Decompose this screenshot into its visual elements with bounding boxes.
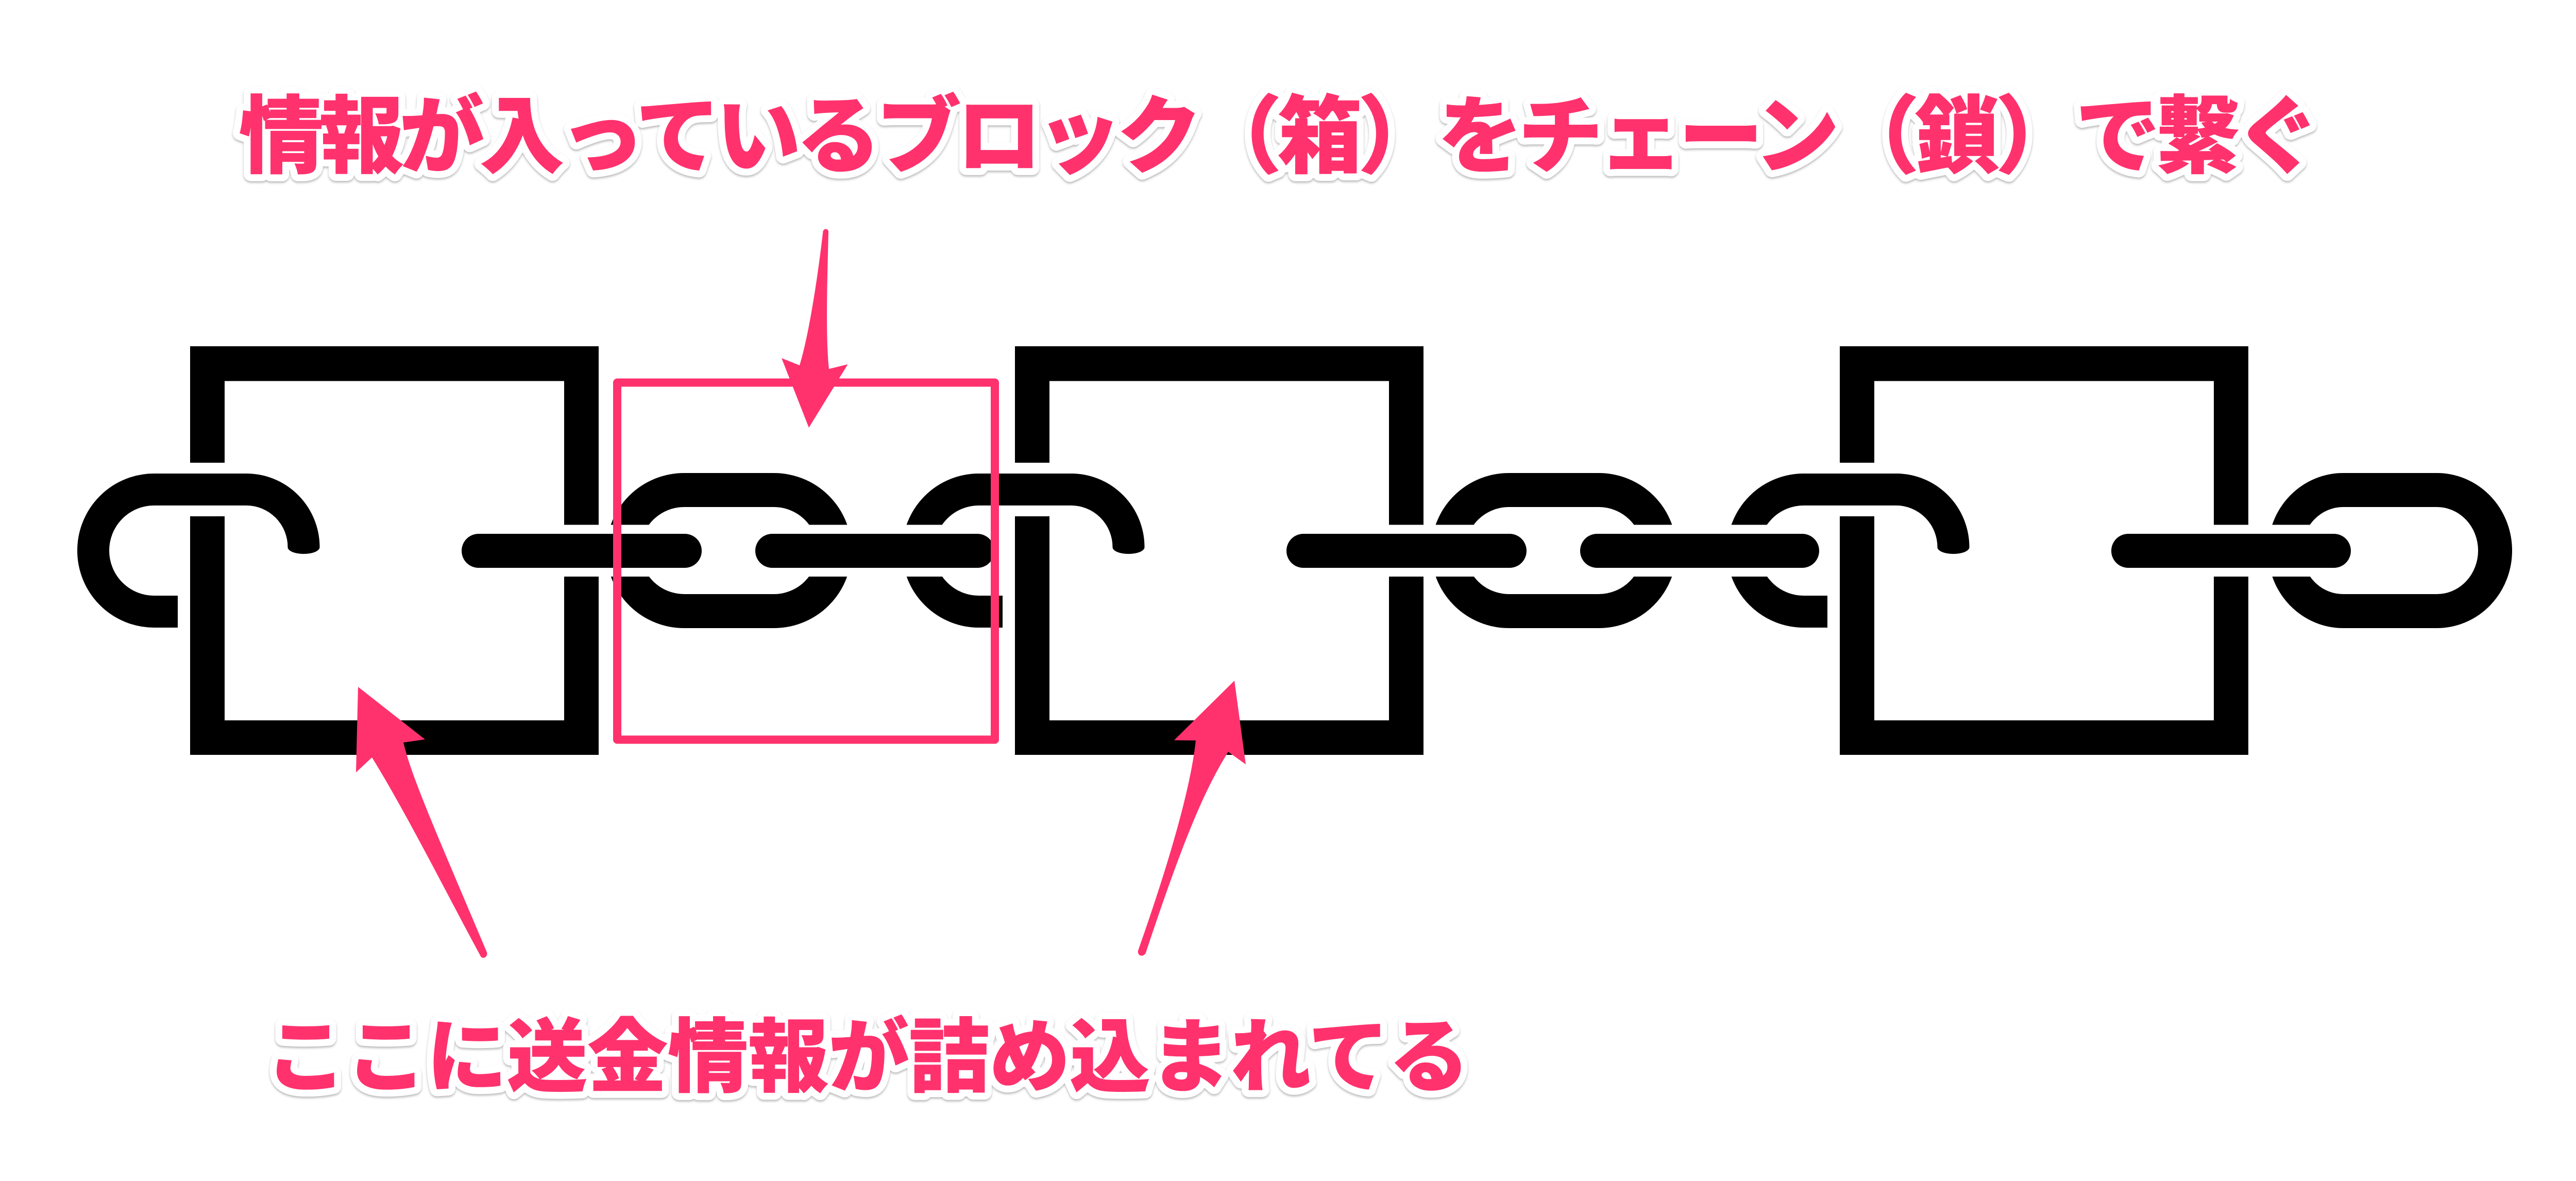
connecting bars xyxy=(462,534,2351,568)
block 2 box xyxy=(1015,346,1423,755)
block 1 box xyxy=(190,346,599,755)
heading: 情報が入っているブロック（箱）をチェーン（鎖）で繋ぐ xyxy=(239,90,2320,184)
end link of the chain xyxy=(2262,490,2495,611)
arrow: heading to frame xyxy=(782,229,848,428)
arrow: to block 2 xyxy=(1138,681,1246,956)
hook link of block 3 xyxy=(1721,490,1969,612)
block 3 box xyxy=(1840,346,2248,755)
chain link between blocks 1 and 2 xyxy=(603,490,855,611)
arrow: to block 1 xyxy=(356,687,487,958)
bottom caption: ここに送金情報が詰め込まれてる xyxy=(266,1013,1469,1103)
hook link of block 1 xyxy=(93,490,319,612)
highlight frame around one chain link xyxy=(617,382,995,740)
bottom caption: ここに送金情報が詰め込まれてる xyxy=(266,1013,1469,1103)
heading: 情報が入っているブロック（箱）をチェーン（鎖）で繋ぐ xyxy=(239,90,2320,184)
hook link of block 2 xyxy=(896,490,1145,612)
chain link between blocks 2 and 3 xyxy=(1428,490,1680,611)
